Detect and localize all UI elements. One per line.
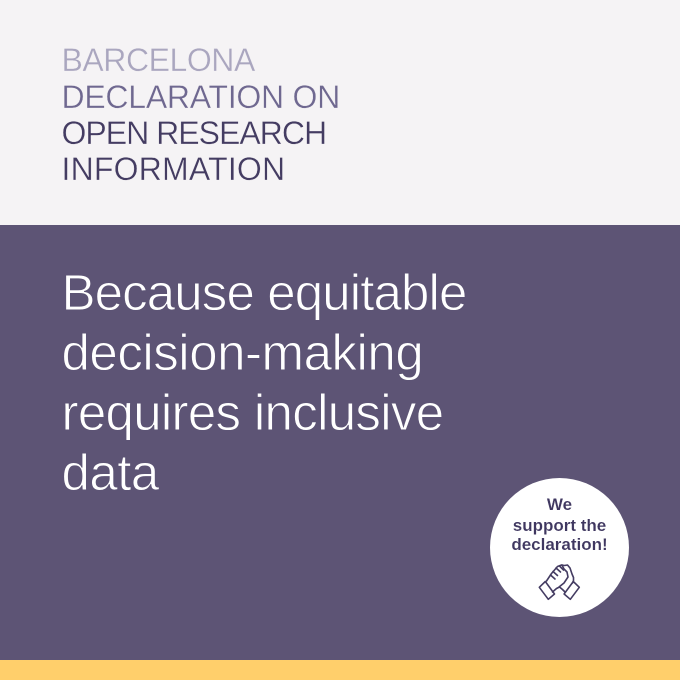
- heading: declaration title: BARCELONA: [62, 42, 255, 78]
- main statement text: Because equitable: [62, 264, 467, 321]
- main panel: [0, 225, 680, 660]
- badge text: declaration!: [511, 535, 608, 554]
- badge text: [511, 495, 608, 554]
- badge text: support the: [513, 516, 606, 535]
- heading: declaration title: DECLARATION ON: [62, 79, 340, 115]
- badge circle: [490, 478, 629, 617]
- footer bar: [0, 660, 680, 680]
- header panel: [0, 0, 680, 225]
- main statement text: requires inclusive: [62, 384, 443, 441]
- main statement text: decision-making: [62, 324, 423, 381]
- icon: clasped hands: [538, 564, 580, 600]
- main statement text: data: [62, 444, 159, 501]
- heading: declaration title: [62, 42, 340, 187]
- badge text: We: [547, 495, 572, 514]
- heading: declaration title: INFORMATION: [62, 151, 285, 187]
- main statement text: [62, 264, 467, 501]
- heading: declaration title: OPEN RESEARCH: [62, 115, 326, 151]
